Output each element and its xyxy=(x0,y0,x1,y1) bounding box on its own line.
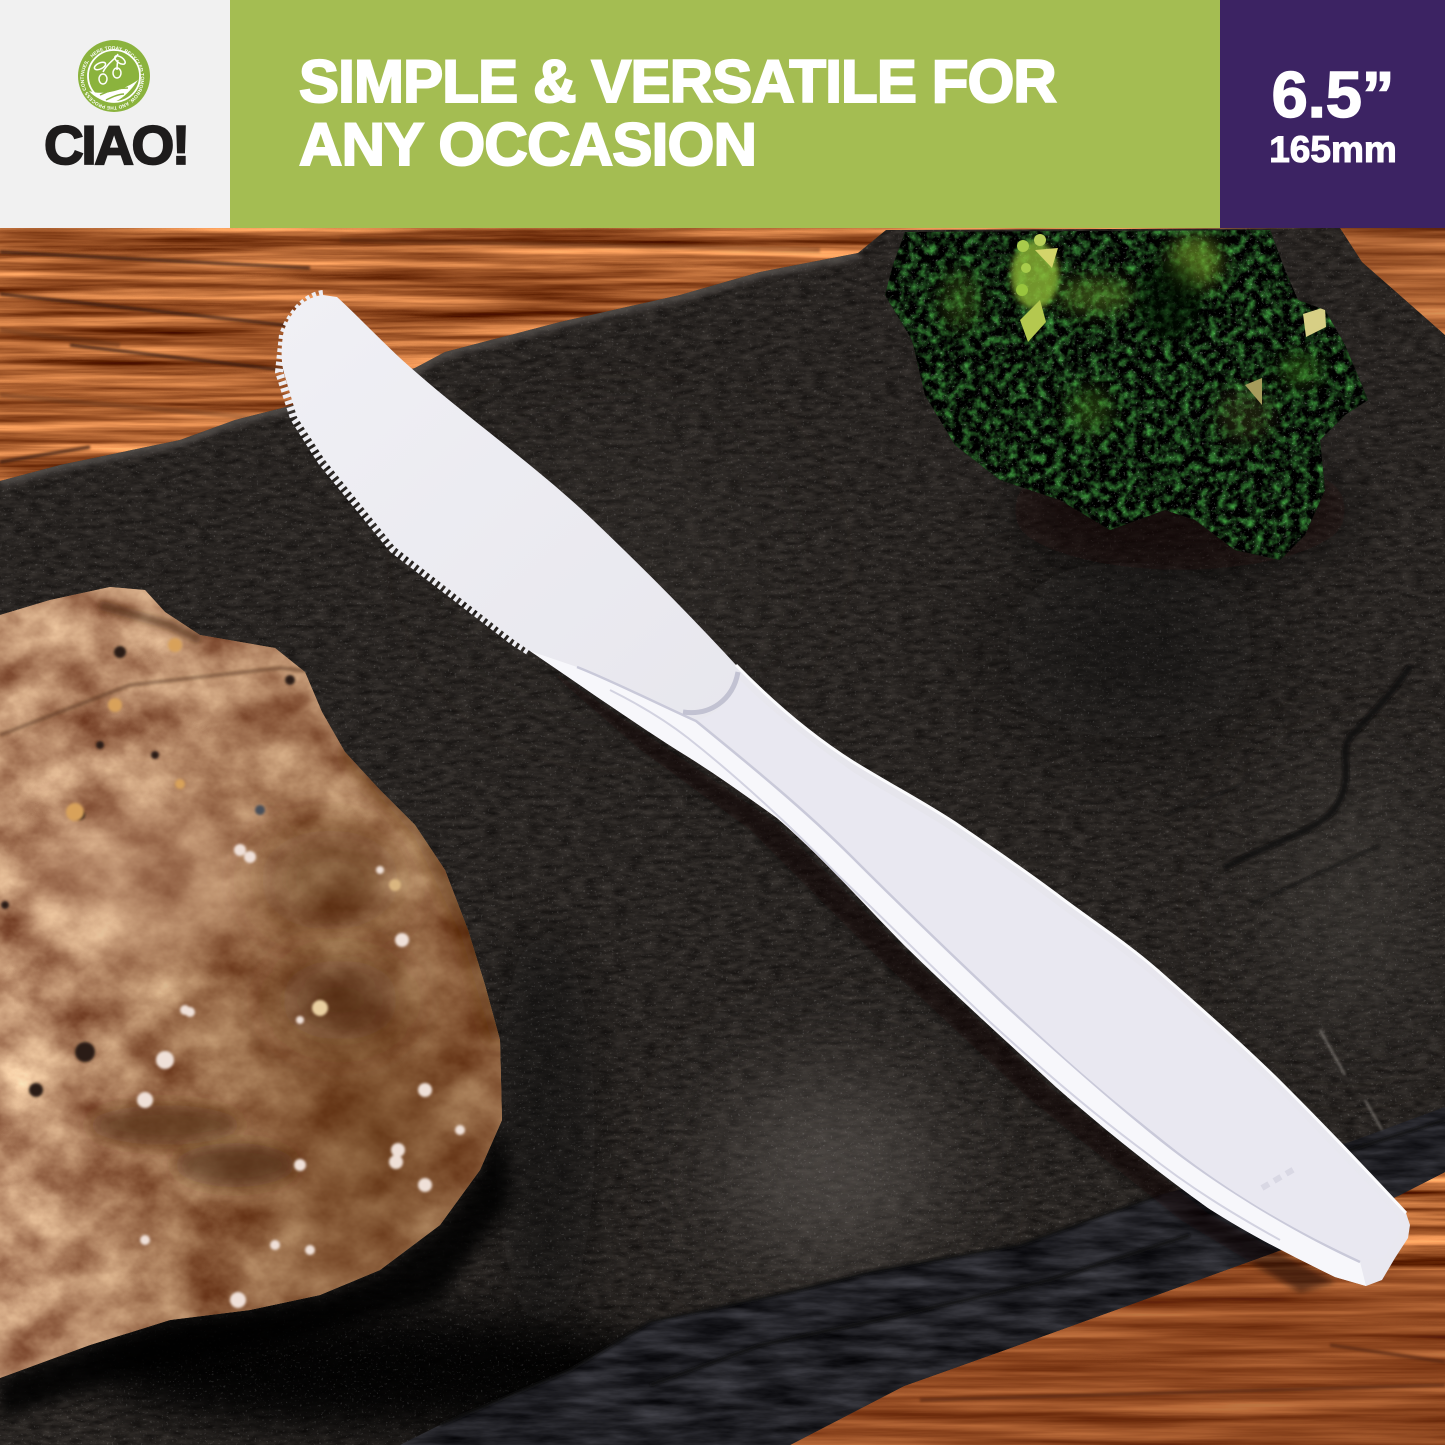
size in millimetres: 165mm xyxy=(1269,129,1397,170)
steak shadow xyxy=(0,1120,512,1420)
slate chipped rim, bottom edge xyxy=(380,1100,1445,1445)
knife shadow xyxy=(530,655,1335,1292)
knife handle face xyxy=(1018,1014,1332,1248)
knife handle ridge xyxy=(530,651,1366,1286)
title xyxy=(299,48,1056,178)
steak xyxy=(0,570,520,1420)
panel: headline banner xyxy=(230,0,1220,228)
title: ANY OCCASION xyxy=(299,111,756,178)
knife body xyxy=(282,295,1410,1286)
icon: green recycled badge: HERE TODAY, RECYCLED TOMORROW. AND THE PROCESS CONTINUES. xyxy=(80,46,144,110)
water trail on slate xyxy=(1224,665,1411,868)
knife xyxy=(279,294,1410,1292)
size in inches: 6.5” xyxy=(1272,58,1394,131)
broccoli xyxy=(880,228,1375,570)
logo wordmark: CIAO! xyxy=(44,114,188,176)
panel: size badge xyxy=(1220,0,1445,228)
knife serrated edge xyxy=(279,294,530,652)
title: SIMPLE & VERSATILE FOR xyxy=(299,48,1056,115)
panel: logo xyxy=(0,0,230,228)
broccoli shadow xyxy=(1010,450,1350,570)
steak highlights and pepper flecks xyxy=(137,844,465,1308)
slate chipped rim, top edge xyxy=(0,253,858,481)
knife bolster notch xyxy=(683,672,738,713)
